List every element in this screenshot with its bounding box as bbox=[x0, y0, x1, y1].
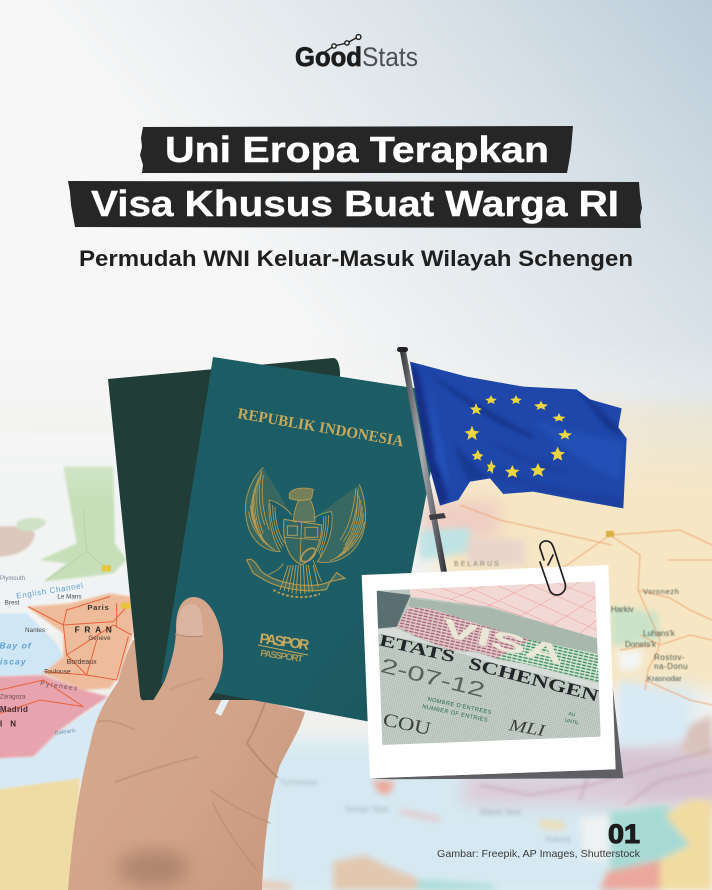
polaroid shadow bbox=[370, 650, 623, 779]
icon: paperclip bbox=[540, 541, 565, 595]
visa photograph bbox=[376, 582, 600, 745]
passport word PASSPORT: PASSPORT bbox=[260, 648, 304, 665]
polaroid frame bbox=[362, 565, 616, 778]
visa photograph: 2-07-12 bbox=[378, 654, 487, 702]
map west: France, Spain, Britain bbox=[0, 433, 133, 890]
page number: 01 bbox=[608, 819, 640, 849]
map west: France, Spain, Britain: Toulouse bbox=[44, 668, 71, 675]
map roads and labels east bbox=[460, 505, 712, 705]
visa photograph: AU bbox=[568, 711, 576, 718]
map west: France, Spain, Britain: Paris bbox=[87, 603, 109, 612]
visa photograph: COU bbox=[381, 709, 433, 740]
background map of Europe: BELARUS bbox=[454, 561, 501, 568]
background map of Europe: Ionian Sea bbox=[345, 804, 388, 814]
map west: France, Spain, Britain: Genève bbox=[88, 635, 111, 642]
map west: France, Spain, Britain: Balearic bbox=[54, 728, 77, 737]
map west: France, Spain, Britain: Plymouth bbox=[0, 576, 25, 582]
background map of Europe: Luhans'k bbox=[643, 629, 676, 638]
background map of Europe: Tyrrhenian bbox=[280, 778, 318, 787]
map west: France, Spain, Britain: Nantes bbox=[25, 627, 45, 634]
background map of Europe bbox=[0, 396, 712, 890]
flagpole bbox=[397, 347, 447, 572]
visa photograph: MLI bbox=[506, 715, 548, 740]
title banner line one: Uni Eropa Terapkan bbox=[165, 129, 549, 170]
background map of Europe: Harkiv bbox=[611, 605, 634, 614]
logo: GoodStats: Good bbox=[295, 42, 362, 72]
passport back cover, dark green bbox=[108, 358, 340, 700]
map west: France, Spain, Britain: iscay bbox=[0, 656, 27, 666]
background map of Europe: Ankara bbox=[545, 835, 571, 844]
map west: France, Spain, Britain: Bordeaux bbox=[67, 659, 97, 666]
map west: France, Spain, Britain: Bay of bbox=[0, 640, 32, 650]
icon: Garuda Pancasila emblem bbox=[245, 467, 366, 597]
background map of Europe: Donets'k bbox=[625, 640, 657, 649]
visa photograph: SCHENGEN bbox=[467, 654, 601, 706]
visa text: VISA bbox=[439, 612, 568, 670]
map west: France, Spain, Britain: Le Mans bbox=[57, 593, 82, 600]
background map of Europe: na-Donu bbox=[654, 662, 688, 671]
flag stars bbox=[465, 395, 572, 478]
background map of Europe: Krasnodar bbox=[647, 674, 682, 683]
title banner line one bbox=[140, 126, 573, 173]
title banner line two: Visa Khusus Buat Warga RI bbox=[91, 183, 619, 224]
visa photograph: NOMBRE D'ENTREES bbox=[427, 697, 492, 716]
passport front cover, teal, Republik Indonesia bbox=[161, 357, 446, 724]
map west: France, Spain, Britain: IN bbox=[0, 720, 24, 729]
polaroid photo of Schengen visa bbox=[362, 565, 623, 779]
EU flag bbox=[410, 362, 627, 508]
map west: France, Spain, Britain: Zaragoza bbox=[0, 694, 26, 700]
hand: palm and fingers behind passports bbox=[68, 640, 305, 890]
passport word PASPOR: PASPOR bbox=[258, 631, 311, 654]
logo: GoodStats bbox=[295, 35, 418, 72]
visa photograph: ETATS bbox=[377, 630, 457, 666]
palm creases and shadow bbox=[117, 850, 189, 886]
map west: France, Spain, Britain: Pyrenees bbox=[40, 680, 79, 693]
map west: France, Spain, Britain: FRAN bbox=[75, 625, 116, 635]
background map of Europe: Rostov- bbox=[654, 653, 685, 662]
visa photograph: UNTIL bbox=[564, 718, 580, 727]
thumb nail bbox=[177, 604, 203, 636]
map west: France, Spain, Britain: Madrid bbox=[0, 705, 28, 714]
visa photograph: NUMBER OF ENTRIES bbox=[422, 704, 488, 724]
map colour regions right and bottom bbox=[262, 400, 712, 890]
passport heading: REPUBLIK INDONESIA bbox=[236, 405, 406, 450]
image credit: Gambar: Freepik, AP Images, Shutterstock bbox=[437, 848, 641, 860]
background map of Europe: Voronezh bbox=[643, 587, 680, 596]
icon: rising line chart bbox=[322, 35, 361, 54]
logo: GoodStats: Stats bbox=[362, 42, 418, 72]
hand: thumb in front of passport bbox=[95, 597, 270, 890]
subtitle: Permudah WNI Keluar-Masuk Wilayah Schengen bbox=[79, 246, 633, 271]
map west: France, Spain, Britain: Brest bbox=[5, 600, 20, 607]
map west: France, Spain, Britain: English Channel bbox=[16, 581, 84, 601]
background map of Europe: Black Sea bbox=[480, 807, 521, 817]
